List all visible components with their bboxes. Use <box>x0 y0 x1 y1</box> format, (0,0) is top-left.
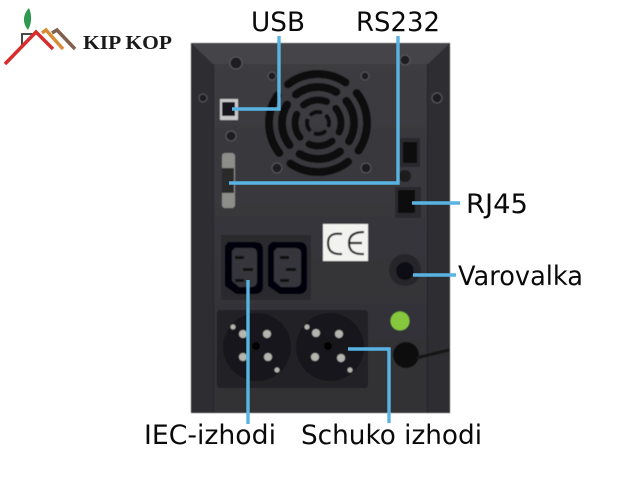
label: USB: USB <box>251 7 305 38</box>
label: Schuko izhodi: Schuko izhodi <box>301 420 482 451</box>
socket top right <box>400 138 420 167</box>
label: RS232: RS232 <box>356 7 440 38</box>
label: Varovalka: Varovalka <box>458 261 583 292</box>
RS232 leader <box>229 36 398 183</box>
power cord <box>393 342 449 368</box>
RJ45 port <box>395 187 421 218</box>
USB leader <box>232 36 279 109</box>
icon: green leaf <box>24 8 31 30</box>
label: IEC-izhodi: IEC-izhodi <box>144 420 276 451</box>
callout lines <box>229 36 460 424</box>
Varovalka leader <box>413 273 456 277</box>
Schuko outlets <box>217 310 368 388</box>
Schuko leader <box>348 349 389 423</box>
fuse <box>389 254 421 286</box>
IEC leader <box>246 280 250 424</box>
fan screws <box>199 55 442 173</box>
USB port <box>220 99 238 120</box>
UPS rear panel <box>191 43 450 413</box>
fan grille <box>269 74 367 172</box>
RS232 port <box>222 153 235 208</box>
RJ45 leader <box>412 201 460 205</box>
IEC outlets <box>221 235 311 300</box>
logo: KIP KOP <box>5 8 172 64</box>
label: RJ45: RJ45 <box>466 189 528 220</box>
logo wordmark: KIP KOP <box>83 32 172 54</box>
icon: house roofs <box>5 30 75 64</box>
CE mark <box>323 224 368 261</box>
green indicator <box>390 312 410 330</box>
panel body <box>191 43 450 413</box>
